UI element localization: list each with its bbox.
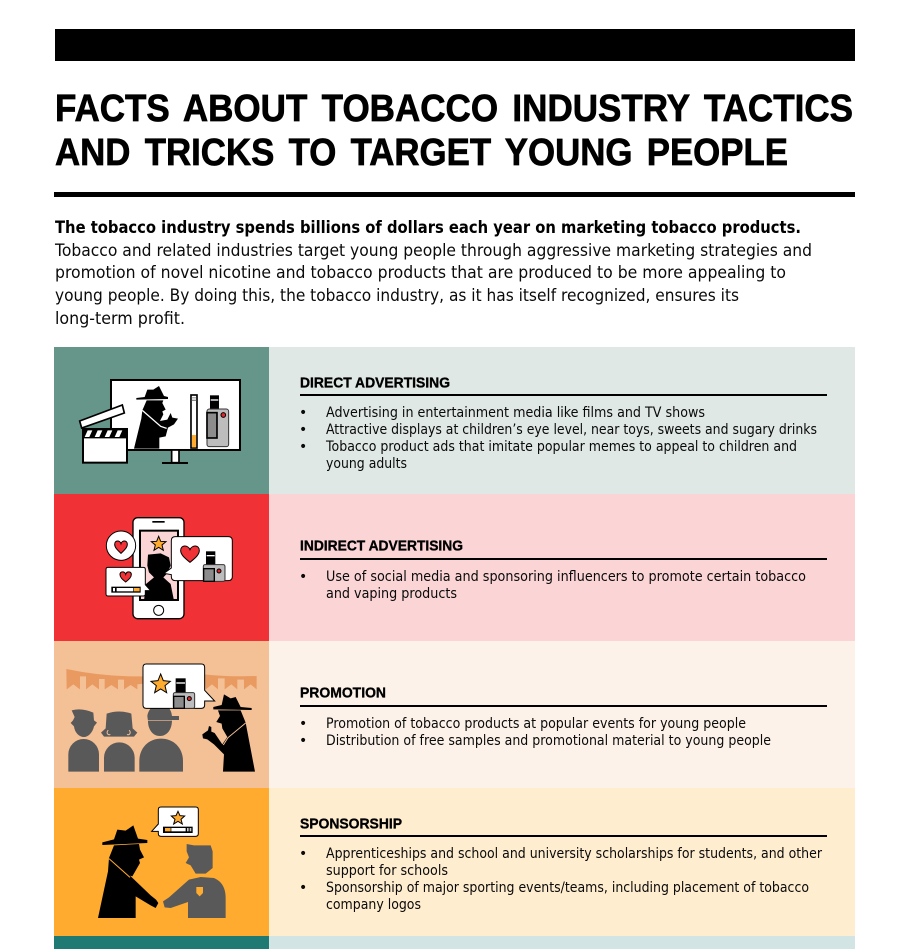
bullet list: • — [299, 716, 307, 732]
bullet list: Tobacco product ads that imitate popular memes to appeal to children and — [325, 439, 797, 455]
panel: direct advertising — [54, 347, 855, 494]
bullet list — [299, 569, 806, 602]
heading: INDIRECT ADVERTISING — [300, 538, 463, 554]
bullet list: • — [299, 422, 307, 438]
bullet list: • — [299, 405, 307, 421]
bullet list: • — [299, 569, 307, 585]
intro text — [54, 218, 812, 328]
icon: crowd at event with villain and speech bubble — [66, 664, 257, 772]
bullet list: Advertising in entertainment media like films and TV shows — [326, 405, 705, 421]
intro text: young people. By doing this, the tobacco industry, as it has itself recognized, ensures its — [55, 286, 739, 305]
bullet list: Attractive displays at children’s eye level, near toys, sweets and sugary drinks — [326, 422, 817, 438]
bullet list: young adults — [326, 456, 407, 472]
bullet list: Promotion of tobacco products at popular events for young people — [326, 716, 746, 732]
title — [55, 88, 853, 174]
heading: SPONSORSHIP — [300, 816, 402, 832]
panel: next section (cropped) — [54, 936, 855, 949]
bullet list: Use of social media and sponsoring influencers to promote certain tobacco — [326, 569, 806, 585]
bullet list: and vaping products — [326, 586, 457, 602]
bullet list — [299, 846, 822, 913]
intro text: The tobacco industry spends billions of dollars each year on marketing tobacco products. — [55, 218, 801, 237]
bullet list — [299, 405, 817, 472]
bullet list — [299, 716, 771, 749]
bullet list: • — [299, 880, 307, 896]
heading: DIRECT ADVERTISING — [300, 374, 450, 392]
bullet list: • — [299, 733, 307, 749]
bullet list: Sponsorship of major sporting events/teams, including placement of tobacco — [326, 880, 809, 896]
icon: screen with villain, cigarette, vape and clapperboard — [80, 380, 240, 464]
title: AND TRICKS TO TARGET YOUNG PEOPLE — [55, 132, 788, 174]
panel: promotion — [54, 641, 855, 788]
icon: phone with social media bubbles — [106, 518, 232, 619]
bullet list: Distribution of free samples and promotional material to young people — [326, 733, 771, 749]
heading: PROMOTION — [300, 684, 386, 702]
panel: indirect advertising — [54, 494, 855, 641]
intro text: promotion of novel nicotine and tobacco products that are produced to be more appealing to — [55, 263, 786, 282]
bullet list: company logos — [326, 897, 421, 913]
panel: sponsorship — [54, 788, 855, 936]
bullet list: support for schools — [326, 863, 448, 879]
top black banner — [55, 29, 855, 61]
intro text: Tobacco and related industries target young people through aggressive marketing strategies and — [54, 241, 812, 260]
title: FACTS ABOUT TOBACCO INDUSTRY TACTICS — [55, 88, 853, 130]
bullet list: Apprenticeships and school and university scholarships for students, and other — [326, 846, 822, 862]
icon: villain shaking hands with young person — [98, 807, 226, 918]
intro text: long-term profit. — [55, 309, 185, 328]
bullet list: • — [299, 439, 307, 455]
bullet list: • — [299, 846, 307, 862]
